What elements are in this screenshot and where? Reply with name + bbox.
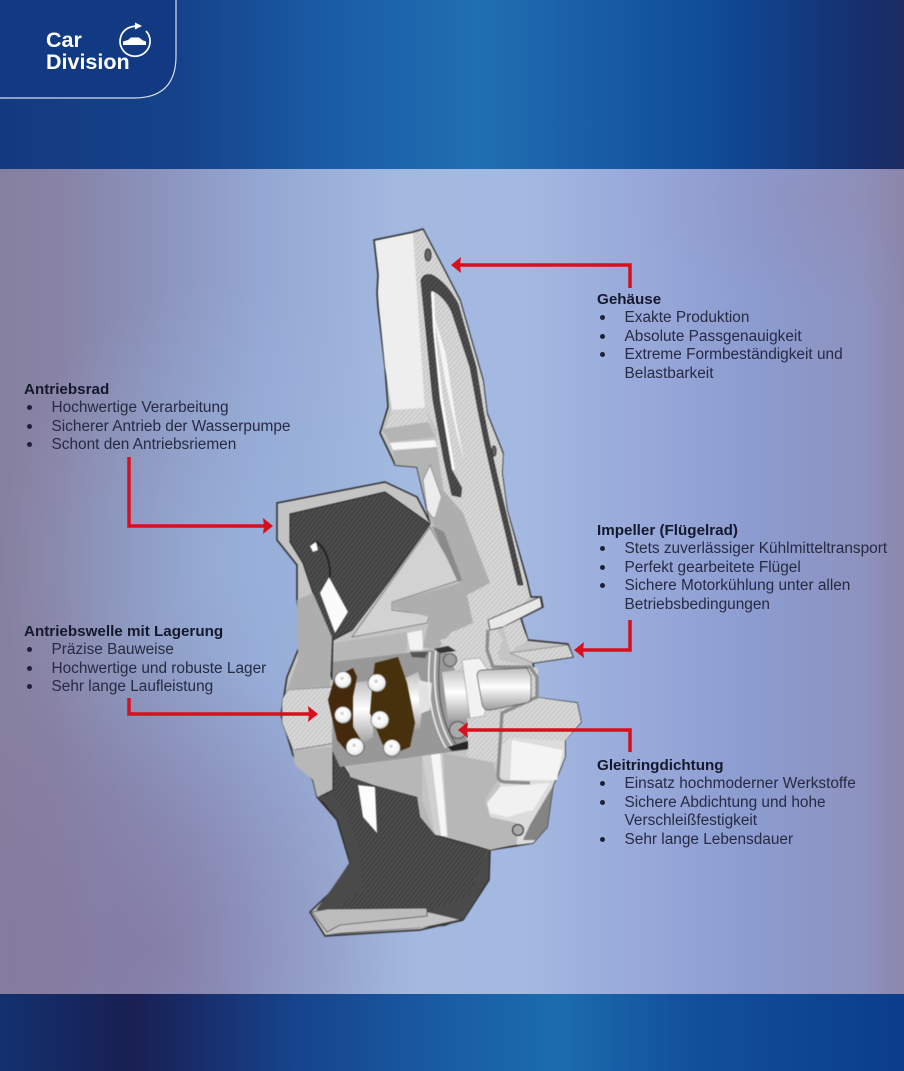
- text: Antriebsrad: [24, 381, 290, 453]
- arrow: Impeller: [574, 620, 630, 658]
- text: Gehäuse: [597, 291, 843, 382]
- arrow: Gehäuse: [451, 257, 630, 288]
- arrow: Antriebswelle: [129, 698, 318, 722]
- pulley: white slot: [320, 577, 348, 633]
- housing: inner oval: [431, 293, 510, 600]
- text: Impeller: Impeller (Flügelrad): [597, 522, 738, 539]
- logo: Car Division: [0, 0, 177, 99]
- arrow: Gleitringdichtung: [458, 722, 630, 752]
- body: grey rib: [392, 490, 490, 650]
- text: Gehäuse: Extreme Formbeständigkeit und: [624, 346, 843, 363]
- body: white stripe: [422, 752, 448, 837]
- logo: Car Division: Car: [46, 28, 82, 52]
- bearing housing background: [332, 650, 480, 767]
- text: Antriebsrad: Sicherer Antrieb der Wasserpumpe: [52, 418, 290, 435]
- impeller: lower block: [487, 697, 581, 845]
- pulley: lower dark section: [319, 750, 490, 920]
- housing and body silhouette: [277, 229, 581, 936]
- bearing races and shaft: [353, 658, 494, 745]
- text: Antriebsrad: Hochwertige Verarbeitung: [52, 399, 229, 416]
- housing: mounting holes: [425, 249, 431, 261]
- housing: hatched flange: [413, 230, 530, 650]
- housing: dark gasket band: [421, 275, 523, 585]
- housing: ledge: [385, 408, 430, 430]
- bottom band: [0, 994, 904, 1071]
- housing: white face: [375, 233, 425, 410]
- top band: [0, 0, 904, 169]
- text: Gleitringdichtung: Einsatz hochmoderner Werkstoffe: [624, 775, 856, 792]
- bearing: left brown ring: [328, 668, 365, 755]
- logo: Car Division: Division: [46, 50, 130, 74]
- text: Gehäuse: Belastbarkeit: [624, 365, 713, 382]
- impeller: grey outline around shaft: [487, 630, 537, 783]
- impeller: bolt: [512, 824, 524, 836]
- text: Gehäuse: Gehäuse: [597, 291, 661, 308]
- bearing balls: [334, 672, 400, 756]
- text: Gleitringdichtung: Verschleißfestigkeit: [624, 812, 757, 829]
- text: Gleitringdichtung: Sehr lange Lebensdauer: [624, 831, 793, 848]
- text: Antriebsrad: Schont den Antriebsriemen: [52, 436, 236, 453]
- text: Gehäuse: Exakte Produktion: [624, 309, 749, 326]
- text: Antriebswelle mit Lagerung: Hochwertige und robuste Lager: [52, 660, 266, 677]
- text: Gleitringdichtung: [597, 757, 856, 848]
- impeller: hatched hub: [467, 705, 505, 763]
- body: light triangle: [352, 527, 460, 637]
- text: Impeller: Perfekt gearbeitete Flügel: [624, 559, 801, 576]
- text: Impeller: Stets zuverlässiger Kühlmitteltransport: [624, 540, 887, 557]
- seal rings: [429, 650, 456, 748]
- text: Gehäuse: Absolute Passgenauigkeit: [624, 328, 802, 345]
- text: Antriebswelle mit Lagerung: Präzise Bauweise: [52, 641, 174, 658]
- bearing: right brown ring: [370, 657, 415, 755]
- pulley hub: left collar: [282, 687, 335, 750]
- text: Impeller: [597, 522, 888, 613]
- text: Antriebswelle mit Lagerung: Sehr lange Laufleistung: [52, 678, 213, 695]
- text: Antriebswelle mit Lagerung: [24, 623, 266, 695]
- body: band above bearing: [333, 632, 407, 665]
- arrow: Antriebsrad: [129, 457, 273, 534]
- text: Antriebswelle mit Lagerung: Antriebswelle mit Lagerung: [24, 623, 223, 640]
- central background panel: [0, 169, 904, 994]
- pulley: lower white slot: [358, 785, 377, 833]
- seal: small bolts: [444, 654, 456, 666]
- body below the bearing: [348, 755, 435, 835]
- text: Gleitringdichtung: Sichere Abdichtung und hohe: [624, 794, 826, 811]
- pulley: lower rim: [312, 908, 427, 932]
- text: Antriebsrad: Antriebsrad: [24, 381, 109, 398]
- text: Gleitringdichtung: Gleitringdichtung: [597, 757, 724, 774]
- shaft end: [477, 668, 531, 710]
- pulley: upper dark section: [290, 492, 430, 680]
- text: Impeller: Betriebsbedingungen: [624, 596, 770, 613]
- impeller: vanes: [488, 597, 542, 630]
- text: Impeller: Sichere Motorkühlung unter allen: [624, 577, 850, 594]
